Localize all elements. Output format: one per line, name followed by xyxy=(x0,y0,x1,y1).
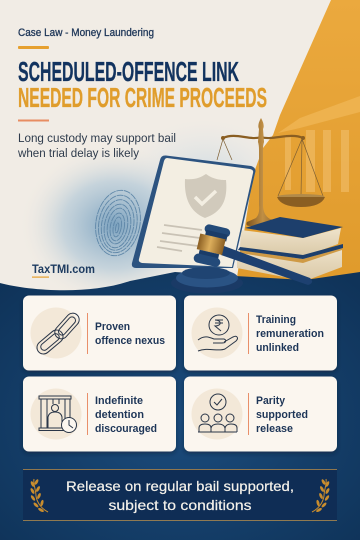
card text: unlinked xyxy=(256,342,299,354)
icon: shield check xyxy=(185,174,226,218)
kicker: Case Law - Money Laundering xyxy=(18,27,154,39)
accent line lower xyxy=(18,120,49,122)
icon: gavel xyxy=(171,223,312,294)
icon: scales of justice xyxy=(217,118,325,226)
tablet document xyxy=(132,155,256,268)
icon: left laurel xyxy=(30,479,48,513)
card text: detention xyxy=(95,409,144,421)
icon: chain link xyxy=(34,311,82,357)
subtitle xyxy=(17,131,176,160)
document text lines xyxy=(157,225,202,251)
card text xyxy=(256,395,308,435)
blue watercolor wash xyxy=(20,145,210,305)
logo: TaxTMI.com: TaxTMI.com xyxy=(32,264,95,276)
card text xyxy=(95,395,157,435)
icon: three people with check xyxy=(198,394,237,432)
conclusion banner xyxy=(23,469,337,521)
banner text: Release on regular bail supported, xyxy=(66,478,294,494)
card text xyxy=(95,321,165,347)
card: training remuneration unlinked xyxy=(184,296,337,370)
card text xyxy=(256,314,324,354)
icon: rupee over hand xyxy=(198,315,237,351)
accent line top xyxy=(18,46,49,49)
card: indefinite detention discouraged xyxy=(23,376,176,452)
card text: Training xyxy=(256,314,296,326)
banner text xyxy=(66,478,294,513)
card text: Parity xyxy=(256,395,285,407)
icon: prison bars with clock xyxy=(39,396,76,432)
subtitle: Long custody may support bail xyxy=(18,131,176,145)
books stack xyxy=(237,217,343,281)
card text: offence nexus xyxy=(95,335,165,347)
orange courthouse panel xyxy=(235,0,360,290)
card text: Proven xyxy=(95,321,130,333)
background: cream upper area xyxy=(0,0,360,300)
card text: Indefinite xyxy=(95,395,143,407)
card text: discouraged xyxy=(95,423,157,435)
subtitle: when trial delay is likely xyxy=(17,146,140,160)
icon: right laurel xyxy=(312,479,330,513)
card text: release xyxy=(256,423,293,435)
title xyxy=(18,56,267,113)
card text: supported xyxy=(256,409,308,421)
card: proven offence nexus xyxy=(23,296,176,370)
card text: remuneration xyxy=(256,328,324,340)
card: parity supported release xyxy=(184,376,337,452)
navy lower background xyxy=(0,272,360,540)
icon: fingerprint xyxy=(91,187,145,259)
banner text: subject to conditions xyxy=(108,497,252,513)
